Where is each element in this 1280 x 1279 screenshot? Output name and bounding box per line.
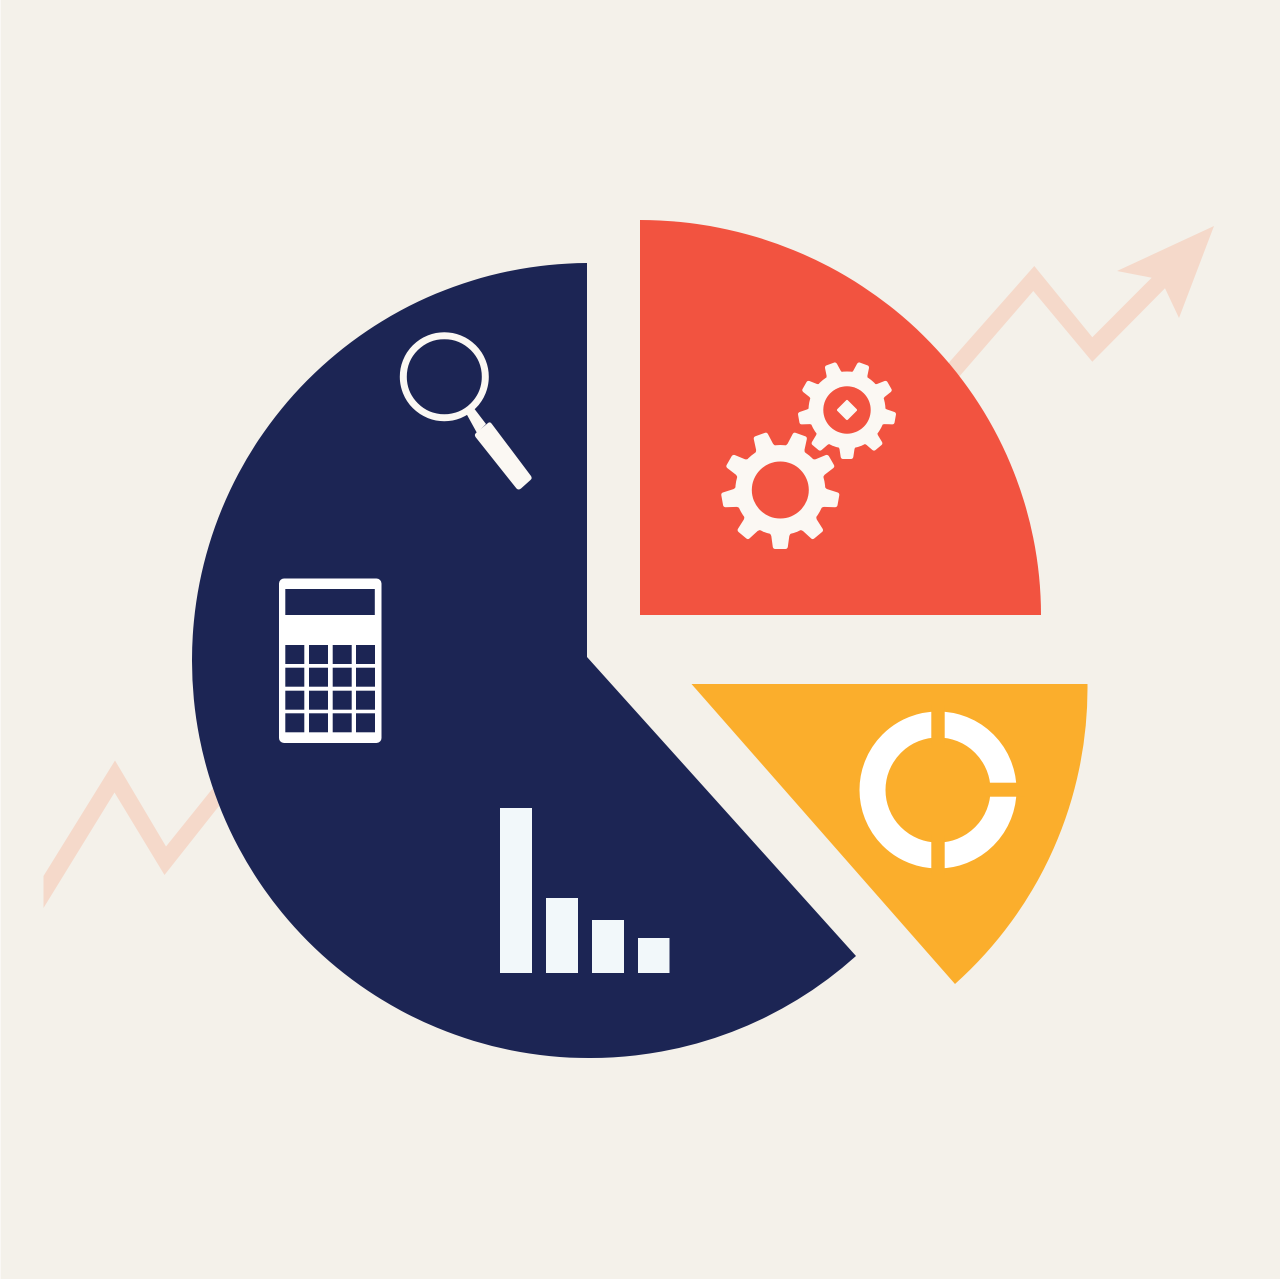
icon: large gear: [720, 430, 841, 549]
bar chart icon: [500, 808, 670, 973]
icon: magnifying glass: [403, 336, 532, 490]
icon: segmented ring: [872, 705, 1025, 875]
panel: navy pie slice: [192, 263, 856, 1058]
icon: small gear: [797, 360, 897, 459]
trend arrow: right segment with arrowhead: [945, 226, 1214, 378]
panel: yellow pie slice: [692, 684, 1088, 984]
trend line: left segment: [44, 760, 219, 908]
panel: red pie slice: [640, 220, 1041, 615]
icon: calculator: [279, 578, 382, 743]
